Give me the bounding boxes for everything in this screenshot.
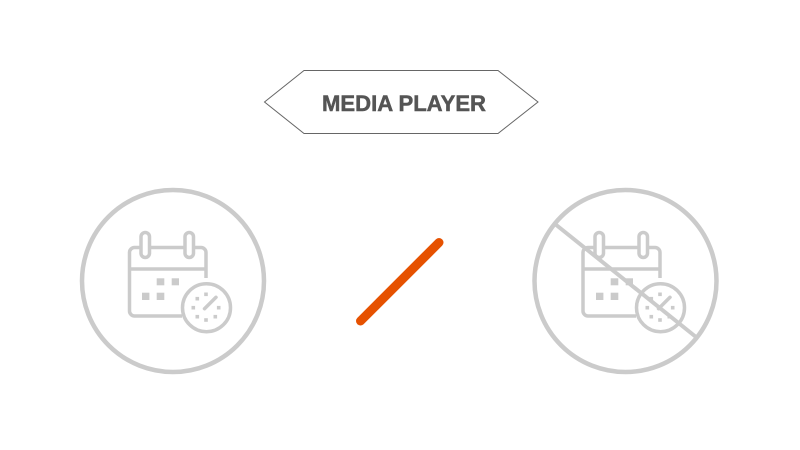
icon: crossed-out calendar with clock in circle: [534, 190, 716, 372]
title badge: [264, 70, 538, 134]
slash divider: [360, 242, 439, 321]
outer circle: [82, 190, 264, 372]
outer circle: [534, 190, 716, 372]
hexagon outline: [264, 70, 538, 134]
calendar: [130, 232, 206, 316]
clock: [182, 284, 230, 332]
calendar date squares: [142, 278, 179, 300]
calendar date squares: [596, 278, 633, 300]
title: MEDIA PLAYER: [322, 91, 486, 116]
icon: calendar with clock in circle: [82, 190, 264, 372]
diagonal strike: [555, 224, 696, 337]
clock: [636, 284, 684, 332]
calendar: [583, 232, 660, 316]
